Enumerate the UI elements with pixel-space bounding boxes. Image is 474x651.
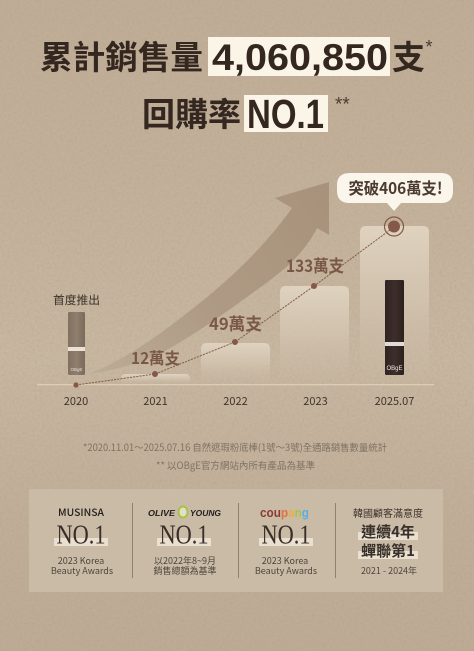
footnote 2: ** 以OBgE官方網站內所有產品為基準 (156, 458, 315, 472)
coupang logo: coupang (260, 505, 309, 520)
footnote 1: *2020.11.01～2025.07.16 自然遮瑕粉底棒(1號～3號)全通路銷售數量統計 (83, 440, 387, 454)
award: Olive Young: 以2022年8~9月 (154, 554, 216, 567)
x axis labels: 2021 (143, 393, 168, 409)
lipstick: current (385, 280, 404, 375)
award: Musinsa (51, 504, 113, 577)
x axis labels: 2022 (223, 393, 248, 409)
award: Musinsa: MUSINSA (58, 504, 105, 519)
callout bubble (337, 173, 453, 211)
baseline axis (37, 384, 434, 385)
heading line 2: repurchase rate: NO.1 (247, 91, 324, 137)
bar: 2021 (121, 374, 190, 384)
label: 12萬支: 12萬支 (131, 345, 180, 369)
title (40, 31, 433, 137)
x axis labels: 2020 (64, 393, 88, 409)
award: Olive Young: 銷售總額為基準 (153, 564, 217, 577)
award: Korea customer satisfaction: 2021 - 2024年 (361, 564, 417, 577)
award: Olive Young (148, 506, 221, 577)
award: Korea customer satisfaction: 韓國顧客滿意度 (353, 505, 423, 520)
footnotes (83, 440, 387, 472)
award: Musinsa: 2023 Korea (58, 554, 104, 567)
award: Korea customer satisfaction: 蟬聯第1 (361, 540, 415, 561)
heading line 1: cumulative sales: * (426, 37, 433, 57)
chart (37, 173, 453, 409)
award: Musinsa: NO.1 (56, 520, 106, 550)
award: Korea customer satisfaction (353, 505, 423, 577)
award: Korea customer satisfaction: 連續4年 (361, 521, 415, 542)
lipstick: first launch: OBgE (70, 367, 83, 372)
lipstick: current: OBgE (386, 366, 403, 372)
heading line 2: repurchase rate: ** (335, 94, 350, 116)
data points (73, 217, 404, 388)
bar: 2022 (201, 343, 270, 384)
growth arrow (88, 182, 329, 374)
heading line 1: cumulative sales: 4,060,850 (212, 37, 388, 78)
award: Coupang: Beauty Awards (255, 564, 317, 577)
award: Coupang: NO.1 (262, 520, 310, 550)
heading line 2: repurchase rate (142, 88, 350, 137)
trend line (76, 227, 394, 385)
x axis labels (64, 393, 414, 409)
award: Olive Young: YOUNG (190, 508, 221, 518)
award: Olive Young: NO.1 (160, 520, 208, 550)
x axis labels: 2023 (303, 393, 328, 409)
label: 49萬支: 49萬支 (209, 310, 262, 335)
dividers (132, 503, 336, 578)
x axis labels: 2025.07 (375, 393, 414, 409)
lipstick: first launch (68, 312, 85, 375)
award: Coupang (255, 505, 317, 577)
heading line 2: repurchase rate: 回購率 (142, 88, 241, 136)
label: first launch: 首度推出 (53, 292, 100, 308)
heading line 1: cumulative sales (40, 31, 433, 79)
bar: 2023 (280, 286, 349, 384)
award: Musinsa: Beauty Awards (51, 564, 113, 577)
panel: awards (29, 489, 443, 592)
label: 133萬支: 133萬支 (286, 252, 344, 277)
bar: 2025.07 (360, 226, 429, 384)
callout bubble: 突破406萬支! (348, 175, 442, 199)
heading line 1: cumulative sales: 支 (392, 31, 425, 79)
award: Olive Young: OLIVE (148, 508, 175, 518)
heading line 1: cumulative sales: 累計銷售量 (40, 31, 203, 79)
award: Coupang: 2023 Korea (262, 554, 308, 567)
